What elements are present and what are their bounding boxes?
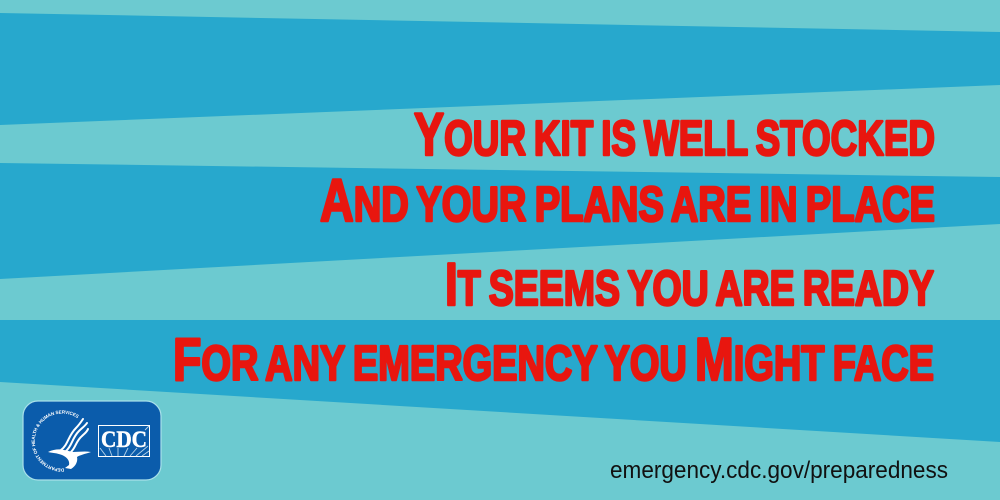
website url: emergency.cdc.gov/preparedness [610,457,948,484]
HHS seal: DEPARTMENT OF HEALTH & HUMAN SERVICES [32,410,79,472]
eagle body [48,449,91,469]
stripe: top [0,13,1000,125]
icon: eagle [48,419,91,469]
eagle wings [61,419,88,452]
headline line 4: FOR ANY EMERGENCY YOU MIGHT FACE [173,326,934,393]
CDC wordmark: CDC [101,427,147,452]
CDC rays [100,426,149,456]
stripe: lower [0,320,1000,442]
stripe: middle [0,163,1000,279]
logo badge [22,400,162,481]
